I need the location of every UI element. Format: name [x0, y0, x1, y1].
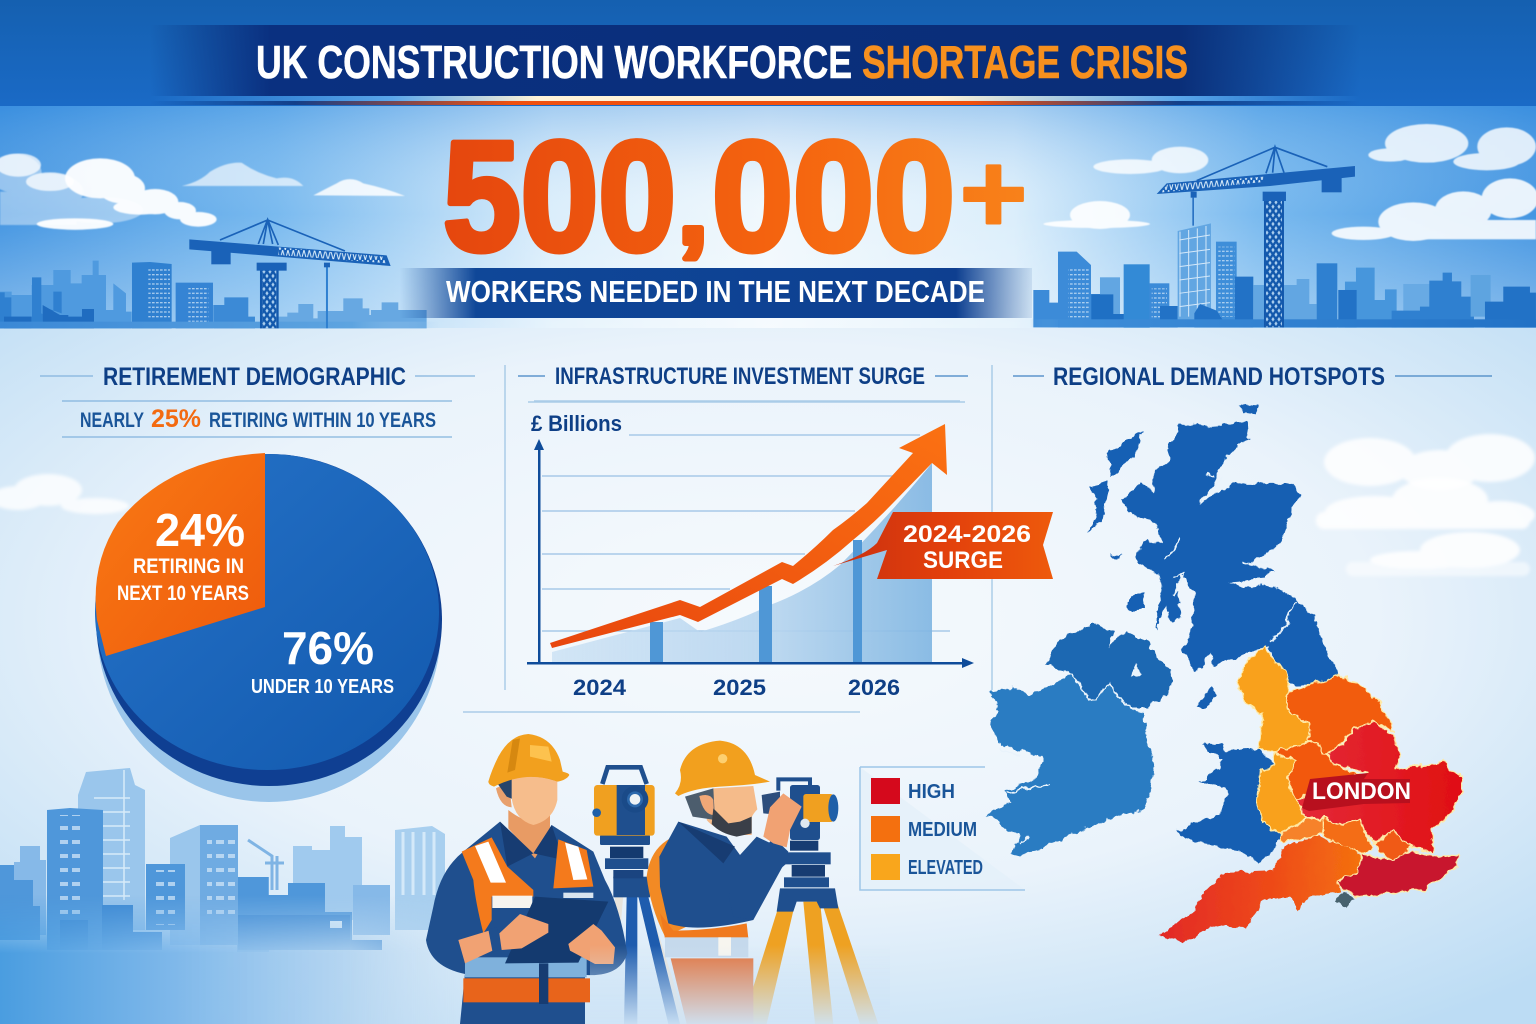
map: Scotland and northern England [1120, 421, 1338, 686]
bars [650, 540, 862, 663]
surge callout: 2024-2026 [903, 521, 1031, 548]
axes [527, 439, 974, 668]
year labels: 2024 [573, 675, 627, 700]
header band [0, 0, 1536, 106]
year labels: 2026 [848, 675, 900, 700]
header: rule under title [150, 96, 1360, 105]
clouds: top left [0, 153, 405, 230]
worker forearm and hand [728, 793, 802, 920]
big number: 500,000+: 500 [443, 110, 676, 284]
pie label: 76%: 76% [282, 622, 374, 674]
legend item: medium [871, 816, 977, 842]
map: Isle of Wight [1335, 893, 1355, 906]
illustration: surveying instrument left [592, 767, 687, 1024]
theodolite body [762, 779, 838, 840]
pie label: 24%: NEXT 10 YEARS [117, 582, 249, 605]
map label: London [1302, 773, 1411, 811]
legend item: elevated [871, 854, 983, 880]
map: Wales [1177, 743, 1282, 862]
axis label: billions: £ Billions [531, 411, 622, 436]
worker body and vest [647, 822, 787, 1024]
fade at base of illustrations [590, 945, 890, 1024]
clouds: top right [1043, 124, 1536, 241]
subheading ribbon [400, 268, 1032, 318]
illustration: worker with theodolite [647, 741, 878, 1024]
map: Scottish islands [1088, 405, 1258, 611]
big number: 500,000+: + [960, 131, 1027, 256]
heading: retirement demographic: RETIREMENT DEMOGRAPHIC [103, 363, 406, 391]
pie chart [95, 453, 442, 802]
pie label: 76% [251, 622, 394, 698]
panel: regional demand hotspots [987, 363, 1492, 943]
year labels: 2025 [713, 675, 766, 700]
theodolite tripod [742, 841, 878, 1024]
background: lower page [0, 328, 1536, 1024]
title: UK CONSTRUCTION WORKFORCE [256, 36, 852, 88]
pie label: 24%: RETIRING IN [133, 555, 244, 578]
illustration: worker with tablet [426, 734, 627, 1024]
year labels [573, 675, 900, 700]
worker head and hard hat [488, 734, 569, 825]
worker vest [462, 837, 593, 1004]
subheading: nearly 25% retiring: 25% [151, 405, 201, 433]
panel: infrastructure investment surge [463, 363, 1053, 712]
big number: 500,000+ [443, 110, 1027, 284]
worker body [460, 973, 585, 1024]
skyline: bottom left [0, 768, 445, 1024]
subheading: nearly 25% retiring: NEARLY [80, 409, 144, 432]
pie label: 76%: UNDER 10 YEARS [251, 676, 394, 698]
growth arrow [550, 424, 947, 648]
big number: 500,000+: 000 [712, 110, 955, 284]
legend item: high: HIGH [908, 781, 955, 803]
heading: regional demand hotspots: REGIONAL DEMAND HOTSPOTS [1053, 363, 1385, 391]
pie slice: 24% [96, 453, 265, 656]
worker head [675, 741, 770, 837]
worker arms and hands [458, 893, 615, 964]
legend item: elevated: ELEVATED [908, 857, 983, 879]
legend item: medium: MEDIUM [908, 819, 977, 841]
map: English regions [1158, 646, 1462, 943]
skyline with crane: left [0, 219, 440, 328]
line chart [527, 411, 1053, 700]
pie label: 24% [117, 504, 249, 605]
pie label: 24%: 24% [155, 504, 245, 556]
clouds: right of map [1316, 434, 1535, 576]
skyline with crane: right [1030, 147, 1536, 328]
map of UK and Ireland [987, 405, 1462, 943]
background: sky band [0, 100, 1536, 328]
legend item: high [871, 778, 955, 804]
panel: retirement demographic [40, 363, 475, 802]
clouds: left of pie [0, 474, 129, 514]
heading: infrastructure investment surge: INFRASTRUCTURE INVESTMENT SURGE [555, 363, 925, 390]
title: SHORTAGE CRISIS [862, 36, 1188, 88]
subheading: nearly 25% retiring: RETIRING WITHIN 10 YEARS [209, 409, 436, 432]
surge callout [833, 512, 1053, 579]
map: Isle of Man [1197, 686, 1217, 707]
legend [860, 767, 1025, 890]
area under curve [552, 463, 932, 663]
big number: 500,000+: , [678, 153, 708, 265]
subheading ribbon: WORKERS NEEDED IN THE NEXT DECADE [446, 274, 985, 309]
surge callout: SURGE [923, 547, 1003, 574]
map: Ireland [987, 623, 1172, 857]
map label: London: LONDON [1312, 778, 1411, 805]
